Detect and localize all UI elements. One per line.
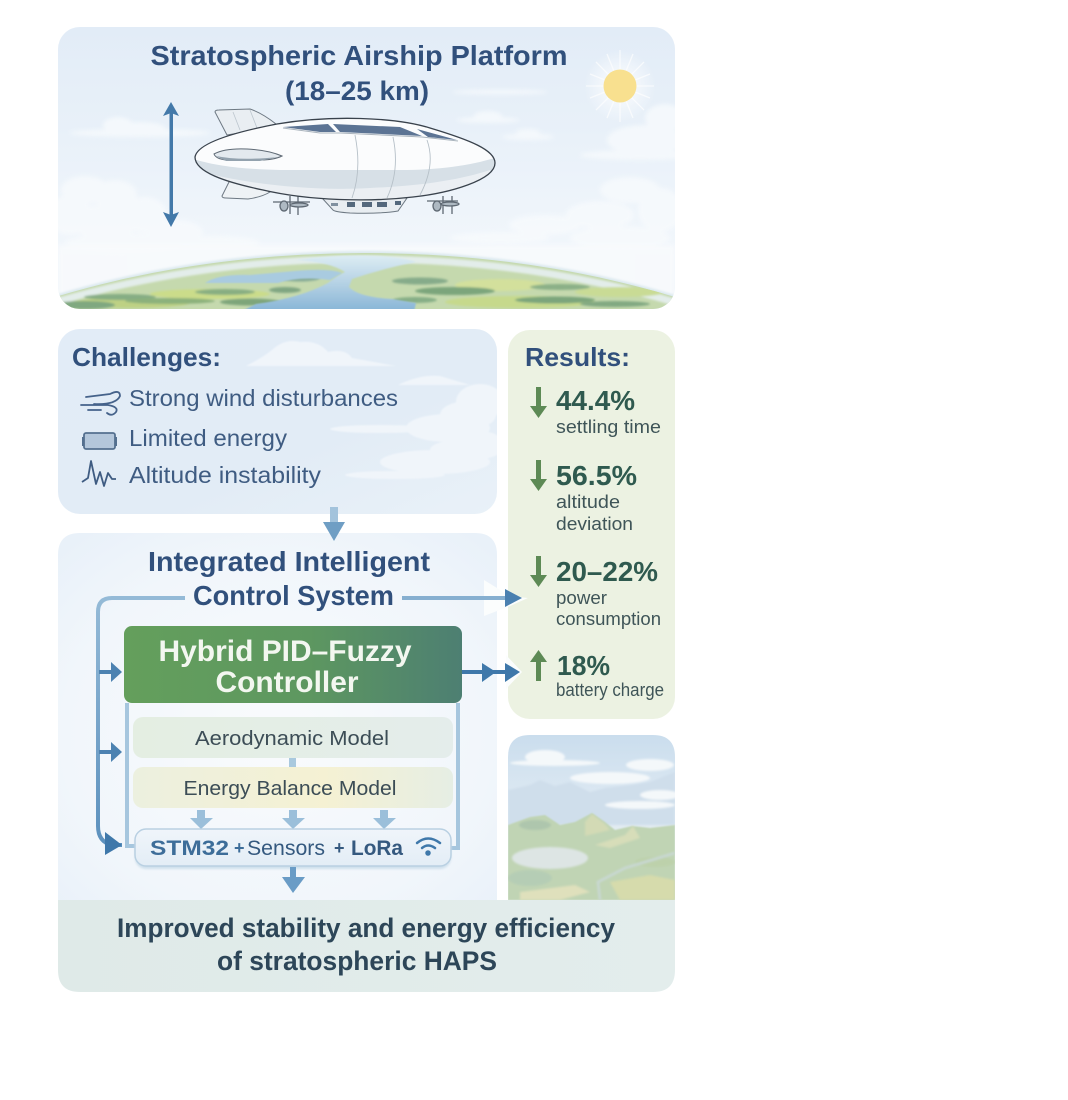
- panel: integrated intelligent control system: [58, 507, 528, 900]
- haze above horizon: [62, 268, 672, 292]
- hull outline: [195, 118, 495, 200]
- panel: results: [508, 330, 675, 719]
- challenges heading: Challenges:: [72, 342, 221, 372]
- icon: altitude signal: [82, 461, 116, 486]
- result: settling time: settling time: [556, 416, 661, 437]
- result: settling time: [530, 385, 661, 437]
- arrow: vertical altitude: [163, 102, 179, 227]
- icon: battery: [82, 433, 117, 449]
- panel: stratospheric airship platform: [58, 27, 675, 309]
- inner bus lines: [127, 703, 458, 848]
- banner background: [58, 900, 675, 992]
- outcome text line 1: Improved stability and energy efficiency: [117, 913, 615, 943]
- icon: wifi: [417, 838, 440, 854]
- results background: [508, 330, 675, 719]
- hardware box: Sensors: [247, 837, 325, 860]
- landscape image: [508, 735, 680, 900]
- solar panels: [283, 124, 457, 140]
- result: power consumption: [530, 556, 661, 629]
- arrow: challenges to control system: [323, 507, 345, 541]
- propellers: [273, 196, 459, 215]
- hardware box: [135, 829, 451, 869]
- challenge text: wind: Strong wind disturbances: [129, 385, 398, 411]
- feedback line: [98, 598, 185, 845]
- pale rim: [60, 254, 672, 304]
- connector between models: [289, 758, 296, 767]
- energy balance model: Energy Balance Model: [184, 777, 396, 800]
- control system background: [58, 533, 497, 900]
- result: altitude deviation: [530, 460, 637, 534]
- gondola: [322, 198, 407, 213]
- earth horizon: [59, 250, 674, 309]
- control system heading: Integrated Intelligent: [148, 546, 430, 577]
- challenge text: energy: Limited energy: [129, 425, 287, 451]
- hills: [508, 813, 675, 900]
- altitude range: (18–25 km): [285, 76, 429, 106]
- arrows: models to hardware: [190, 810, 396, 829]
- control system heading line 2: Control System: [193, 580, 394, 611]
- result: battery charge: [530, 650, 664, 700]
- arrow: controller input top: [99, 662, 122, 682]
- icon: wind: [81, 392, 120, 415]
- arrow: hardware to outcome: [282, 867, 305, 893]
- outcome text line 2: of stratospheric HAPS: [217, 946, 497, 976]
- arrow: to results: [402, 580, 528, 616]
- clouds: [246, 341, 504, 479]
- valley: [508, 847, 675, 900]
- dark forest patches: [84, 294, 156, 300]
- sunlit slopes: [519, 814, 640, 848]
- arrow: controller input bottom: [105, 832, 122, 855]
- result: battery charge: battery charge: [556, 680, 664, 700]
- arrow: controller to results: [462, 655, 522, 689]
- tail fin bottom: [222, 178, 270, 199]
- hull ribs: [352, 135, 430, 198]
- side pod: [214, 149, 282, 160]
- aerodynamic model: [133, 717, 453, 758]
- title: Stratospheric Airship Platform: [150, 40, 568, 71]
- clouds and earth scene: [60, 50, 675, 309]
- landscape sky: [508, 735, 675, 900]
- sun: [584, 50, 656, 122]
- result: power consumption: power: [556, 587, 607, 608]
- water: [240, 256, 416, 312]
- result: altitude deviation: deviation: [556, 513, 633, 534]
- challenge text: altitude: Altitude instability: [129, 462, 321, 488]
- energy balance model: [133, 767, 453, 808]
- result: power consumption: consumption: [556, 608, 661, 629]
- hardware box: +: [234, 838, 245, 858]
- icon: airship: [190, 109, 500, 215]
- outcome banner: [58, 900, 675, 992]
- hybrid controller: [124, 626, 462, 703]
- sky background: [58, 27, 675, 309]
- aerodynamic model: Aerodynamic Model: [195, 727, 389, 750]
- hardware box: STM32: [150, 836, 229, 860]
- light fields: [150, 289, 270, 299]
- landscape clouds: [510, 750, 680, 809]
- result: altitude deviation: 56.5%: [556, 460, 637, 491]
- hybrid controller: Controller: [216, 666, 359, 699]
- tail fin top: [215, 109, 276, 135]
- distant mountains: [508, 780, 675, 825]
- result: power consumption: 20–22%: [556, 556, 658, 587]
- hull shading: [196, 158, 494, 199]
- results heading: Results:: [525, 342, 630, 372]
- hull: [195, 118, 495, 200]
- arrow: controller input middle: [99, 742, 122, 762]
- lake: [205, 270, 342, 283]
- result: battery charge: 18%: [557, 650, 610, 681]
- hardware box: LoRa: [351, 837, 403, 860]
- panel: challenges: [58, 329, 504, 514]
- hardware box: +: [334, 838, 345, 858]
- hybrid controller: Hybrid PID–Fuzzy: [158, 635, 412, 668]
- challenges background: [58, 329, 497, 514]
- result: settling time: 44.4%: [556, 385, 635, 416]
- result: altitude deviation: altitude: [556, 491, 620, 512]
